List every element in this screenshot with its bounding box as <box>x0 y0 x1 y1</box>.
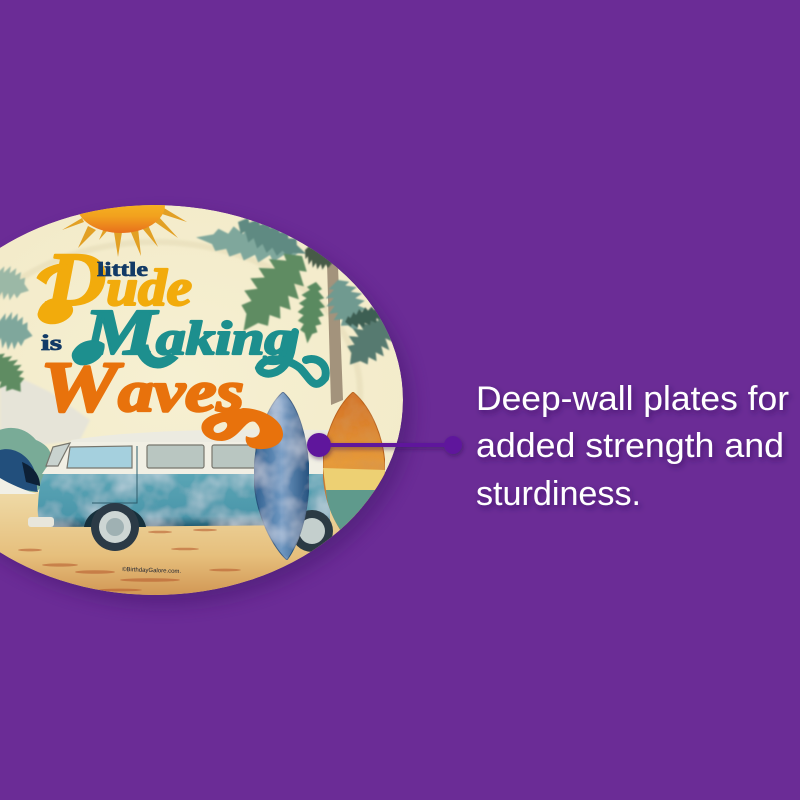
title word: Making: M aking <box>83 296 294 369</box>
crown <box>304 246 333 270</box>
palm trunk <box>327 262 343 405</box>
title word: Dude: Dude <box>45 238 192 322</box>
callout text: sturdiness. <box>476 475 641 513</box>
van wheel arches <box>84 509 146 527</box>
plate inner wall ring <box>0 240 362 400</box>
callout text: added strength and <box>476 427 784 465</box>
title word: Making <box>72 310 292 368</box>
van bumper <box>28 517 54 527</box>
small green frond <box>297 281 326 344</box>
teal swash <box>259 332 326 384</box>
callout text <box>476 380 789 513</box>
callout end dot <box>444 436 462 454</box>
callout dot on plate <box>307 433 331 457</box>
surfboard blue <box>254 392 309 560</box>
Dude swash <box>37 264 73 324</box>
van roof <box>70 430 329 443</box>
plate paper <box>0 205 403 595</box>
right fronds <box>325 279 365 330</box>
plate shadow <box>0 215 412 605</box>
plate illustration <box>0 177 405 600</box>
title word: is: is <box>41 330 63 355</box>
ocean wave <box>0 428 51 494</box>
sand specks <box>18 529 241 591</box>
left fronds <box>0 266 30 300</box>
sun <box>62 205 187 257</box>
van wheels <box>91 503 139 551</box>
camper van <box>28 429 333 552</box>
copyright text: ©BirthdayGalore.com. <box>122 566 182 575</box>
top fronds <box>196 226 298 263</box>
sky wash <box>0 380 90 445</box>
van upper body <box>42 446 323 474</box>
Making swashes <box>72 341 178 368</box>
sand <box>0 492 360 595</box>
large green frond <box>240 253 308 331</box>
surfboard orange <box>323 392 385 532</box>
van lower body <box>38 474 330 527</box>
van door line <box>92 446 137 503</box>
title word: little: little <box>97 259 148 281</box>
van windows <box>46 443 256 468</box>
callout leader line <box>307 433 462 457</box>
callout text: Deep-wall plates for <box>476 380 789 418</box>
title word: Waves: Waves <box>40 347 244 427</box>
palm fronds <box>0 218 392 392</box>
orange swash <box>201 408 283 449</box>
infographic canvas <box>0 205 791 608</box>
